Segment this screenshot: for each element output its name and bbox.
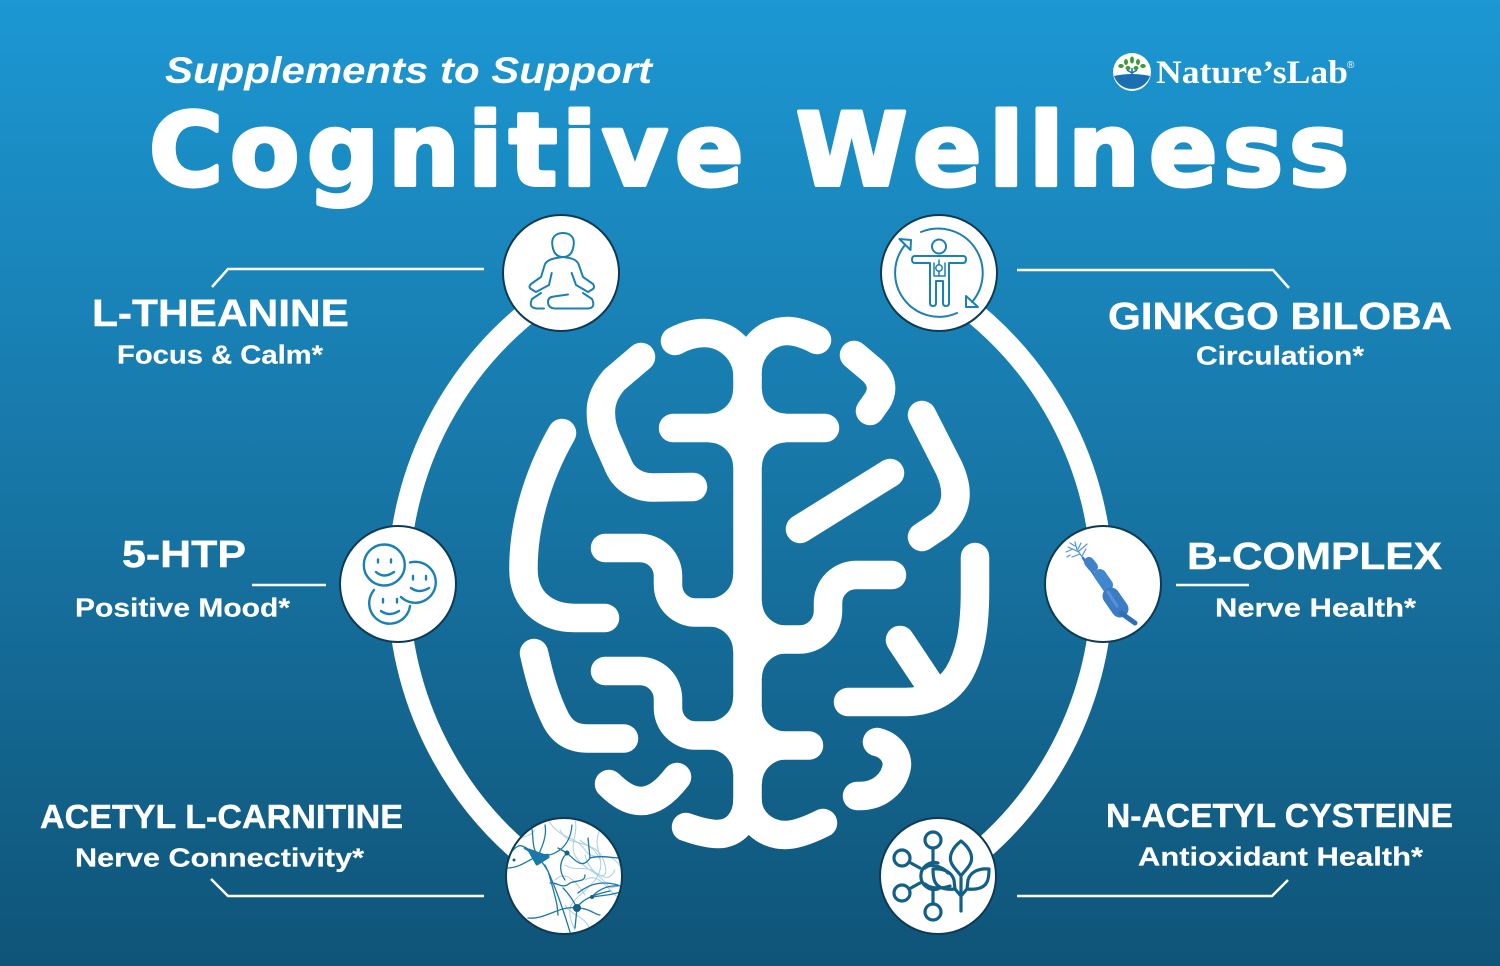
leader line: Ginkgo Biloba [1017, 270, 1289, 288]
label: B-Complex: B-COMPLEX [1187, 536, 1443, 578]
node: Acetyl L-Carnitine neural network image [506, 818, 622, 934]
label: Ginkgo Biloba: Circulation* [1196, 340, 1365, 370]
node: L-Theanine meditation icon [503, 215, 619, 331]
registered mark: ® [1347, 60, 1355, 71]
leader line: 5-HTP [252, 584, 326, 586]
leader line: L-Theanine [212, 269, 484, 287]
ring arcs [398, 302, 1102, 871]
label: 5-HTP [75, 534, 291, 622]
label: B-Complex [1187, 536, 1443, 622]
label: N-Acetyl Cysteine: N-ACETYL CYSTEINE [1106, 797, 1453, 834]
subtitle: Supplements to Support [165, 50, 654, 91]
label: L-Theanine: Focus & Calm* [117, 340, 324, 370]
title: Cognitive Wellness [0, 91, 1349, 209]
label: 5-HTP: Positive Mood* [75, 592, 291, 622]
node: 5-HTP smiley faces icon [340, 526, 456, 642]
label: Acetyl L-Carnitine: ACETYL L-CARNITINE [40, 798, 403, 835]
label: Ginkgo Biloba [1108, 296, 1452, 370]
label: 5-HTP: 5-HTP [122, 534, 246, 576]
label: B-Complex: Nerve Health* [1215, 592, 1417, 622]
label: L-Theanine [92, 293, 349, 370]
logo wordmark: Nature’sLab [1156, 55, 1348, 91]
leader line: B-Complex [1176, 584, 1249, 586]
brain [523, 331, 975, 835]
label: N-Acetyl Cysteine [1106, 797, 1453, 872]
label: L-Theanine: L-THEANINE [92, 293, 349, 335]
node: Ginkgo Biloba body icon [881, 215, 997, 331]
label: N-Acetyl Cysteine: Antioxidant Health* [1138, 842, 1424, 872]
logo emblem [1113, 53, 1151, 91]
leader line: N-Acetyl Cysteine [1017, 880, 1288, 896]
leader line: Acetyl L-Carnitine [211, 879, 484, 896]
node: N-Acetyl Cysteine molecule and leaves icon [880, 818, 996, 934]
logo: Nature's Lab [1113, 53, 1355, 91]
label: Acetyl L-Carnitine [40, 798, 403, 872]
node: B-Complex neuron icon [1045, 526, 1161, 642]
label: Ginkgo Biloba: GINKGO BILOBA [1108, 296, 1452, 338]
label: Acetyl L-Carnitine: Nerve Connectivity* [75, 842, 365, 872]
